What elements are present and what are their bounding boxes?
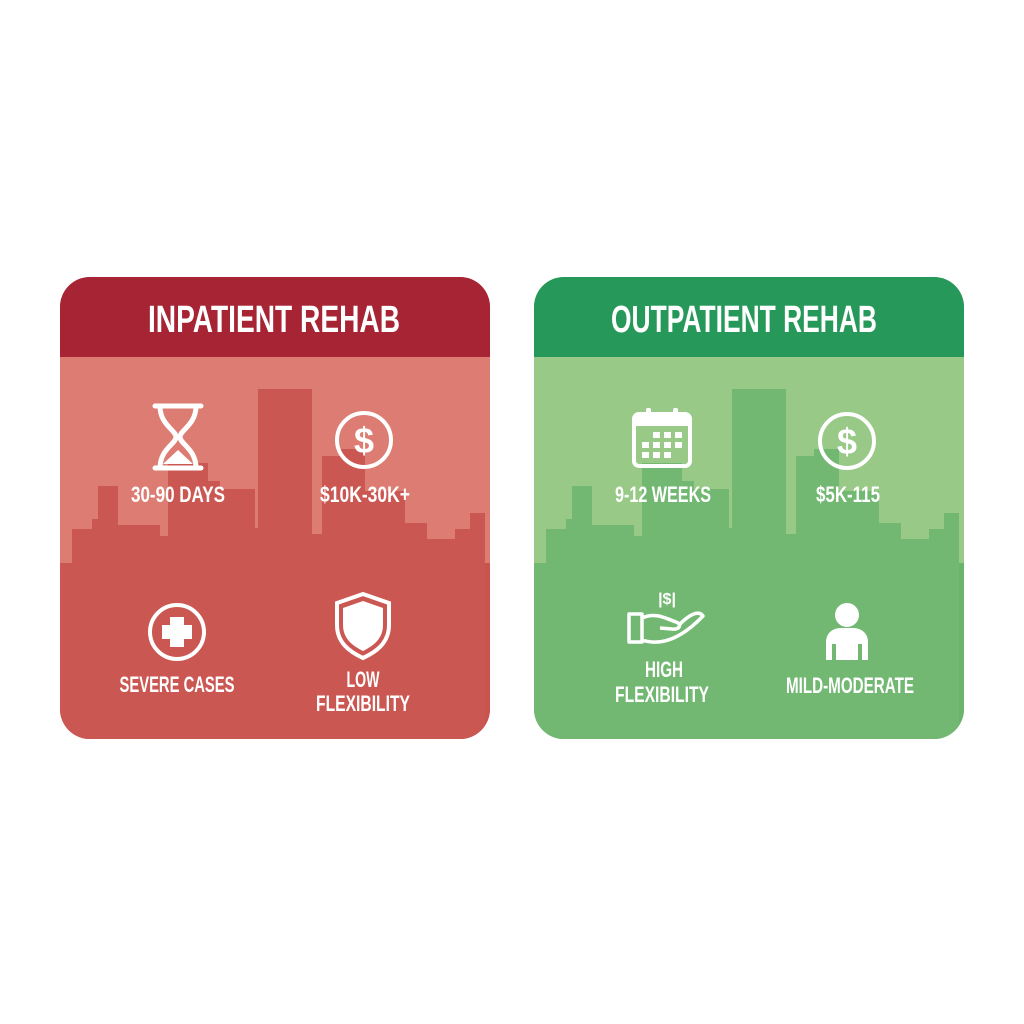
label: 30-90 days: 30-90 DAYS xyxy=(131,482,225,507)
icon: dollar: $ xyxy=(354,420,374,461)
icon: dollar xyxy=(337,413,391,467)
heading: inpatient: INPATIENT REHAB xyxy=(148,299,400,341)
label: low flexibility: LOW xyxy=(346,667,380,692)
heading: outpatient xyxy=(534,277,964,357)
panel: inpatient rehab: FLEXIBILITY xyxy=(316,691,410,716)
heading: outpatient: OUTPATIENT REHAB xyxy=(611,299,877,341)
heading: inpatient xyxy=(60,277,490,357)
icon: medical cross xyxy=(150,605,204,659)
label: mild-moderate: MILD-MODERATE xyxy=(786,673,914,698)
label: cost: $10K-30K+ xyxy=(320,482,410,507)
panel: outpatient rehab xyxy=(534,277,964,740)
icon: dollar: $ xyxy=(837,421,857,462)
label: cost: $5K-115 xyxy=(816,482,880,507)
label: severe cases: SEVERE CASES xyxy=(120,672,234,697)
panel: inpatient rehab xyxy=(60,277,490,740)
icon: hourglass xyxy=(155,406,201,468)
icon: person xyxy=(826,603,868,660)
icon: shield xyxy=(337,594,389,658)
label: 9-12 weeks: 9-12 WEEKS xyxy=(615,482,711,507)
icon: hand with dollar: |$| xyxy=(658,591,676,608)
panel: outpatient rehab: FLEXIBILITY xyxy=(615,682,709,707)
label: high flexibility: HIGH xyxy=(645,657,683,682)
icon: dollar xyxy=(820,414,874,468)
icon: hand with dollar xyxy=(629,591,703,642)
icon: calendar xyxy=(634,408,690,466)
